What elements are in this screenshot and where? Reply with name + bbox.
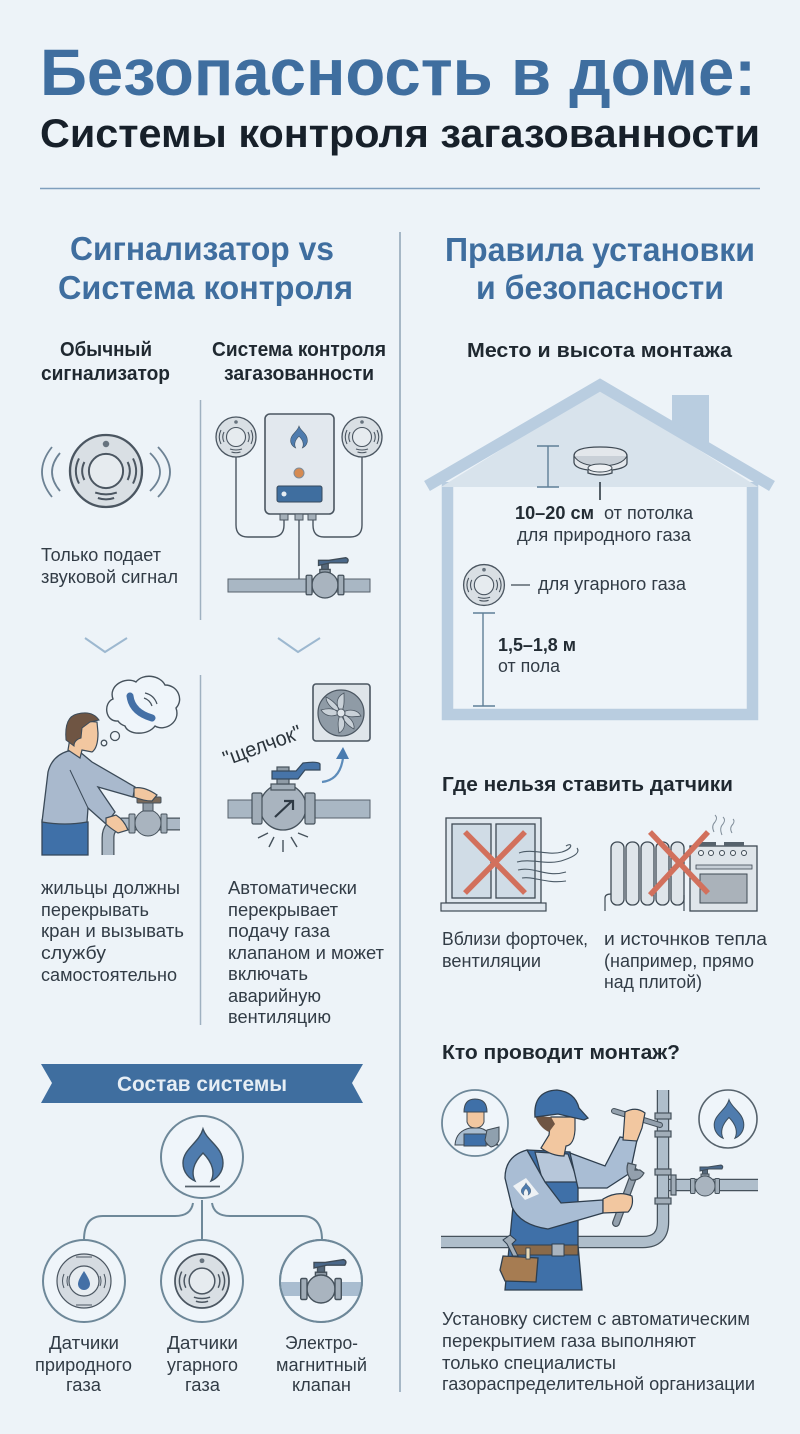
raised tool <box>614 1111 660 1125</box>
subheading: ordinary alarm: сигнализатор <box>41 363 170 385</box>
icon: central gas flame <box>161 1116 243 1198</box>
title <box>40 35 760 156</box>
icon: right detector <box>342 417 382 457</box>
illustration: installer at work <box>441 1090 758 1290</box>
heading: right column: и безопасности <box>476 269 724 306</box>
icon: CO sensor <box>161 1240 243 1322</box>
subheading: ordinary alarm <box>41 339 170 385</box>
subheading: control system: Система контроля <box>212 339 386 361</box>
icon: sounding detector <box>42 435 170 507</box>
text: automatic shutoff: клапаном и может <box>228 943 384 963</box>
pipe <box>108 824 180 855</box>
stove <box>690 815 757 911</box>
text: ceiling distance: для природного газа <box>517 525 692 545</box>
small valve <box>690 1165 723 1196</box>
text: near heat sources <box>604 929 768 992</box>
text: residents must act: службу <box>41 943 106 963</box>
text: automatic shutoff: Автоматически <box>228 878 357 898</box>
icon: pipe with valve <box>228 558 370 598</box>
belt <box>512 1245 578 1255</box>
labels <box>35 1333 367 1395</box>
text: only sound: Только подает <box>41 545 161 565</box>
icon: left detector <box>216 417 256 457</box>
roof <box>427 385 772 486</box>
icon: wall detector <box>464 565 504 605</box>
banner: system composition <box>41 1064 363 1103</box>
icon: ceiling detector <box>574 447 627 475</box>
ceiling bracket <box>537 446 559 487</box>
hands <box>106 788 157 833</box>
icon: solenoid valve <box>280 1240 362 1322</box>
panel: control system <box>212 339 386 598</box>
head <box>68 720 98 758</box>
labels: магнитный <box>276 1355 367 1375</box>
text: near vents: вентиляции <box>442 951 541 971</box>
trousers and bib <box>505 1150 582 1290</box>
tool pouch <box>500 1235 538 1282</box>
text: floor distance: от пола <box>498 656 561 676</box>
labels: Электро- <box>285 1333 358 1353</box>
wires <box>236 457 362 580</box>
text: near vents: Вблизи форточек, <box>442 929 588 949</box>
text: who installs: газораспределительной организации <box>442 1374 755 1394</box>
pipe <box>228 800 370 818</box>
icon: phone <box>130 696 152 718</box>
arrow: to fan <box>322 747 349 782</box>
title: Безопасность в доме: <box>40 35 756 109</box>
diagram: house <box>427 385 772 714</box>
text: near heat sources: (например, прямо <box>604 951 754 971</box>
hair <box>66 713 99 746</box>
text: only sound: звуковой сигнал <box>41 567 178 587</box>
subheading: location and height: Место и высота монтажа <box>467 340 733 362</box>
labels: Датчики <box>167 1333 238 1353</box>
text: automatic shutoff: вентиляцию <box>228 1007 331 1027</box>
chimney <box>672 395 709 450</box>
valve <box>252 762 320 830</box>
wrench <box>616 1172 635 1223</box>
thought bubble <box>107 676 180 733</box>
icon: radiator and stove with cross <box>605 815 757 911</box>
labels: Датчики <box>49 1333 119 1353</box>
text: near heat sources: и источнков тепла <box>604 929 768 949</box>
labels: газа <box>66 1375 102 1395</box>
hand with wrench <box>603 1194 632 1213</box>
heading: left column: Система контроля <box>58 269 353 306</box>
radiator <box>611 842 684 905</box>
icon: fan <box>313 684 370 741</box>
text: automatic shutoff: подачу газа <box>228 921 331 941</box>
connectors <box>84 1200 322 1240</box>
diagram: system composition <box>35 1116 367 1395</box>
heading: left column <box>58 230 353 306</box>
text: automatic shutoff: перекрывает <box>228 900 338 920</box>
title: Системы контроля загазованности <box>40 112 760 156</box>
text: residents must act: самостоятельно <box>41 965 177 985</box>
torso and arms <box>42 751 135 824</box>
hair <box>535 1116 555 1132</box>
text: who installs: Установку систем с автоматическим <box>442 1309 750 1329</box>
text: residents must act: перекрывать <box>41 900 149 920</box>
labels: природного <box>35 1355 132 1375</box>
text: residents must act: жильцы должны <box>41 878 180 898</box>
icon: natural gas sensor <box>43 1240 125 1322</box>
click label: "щелчок" <box>220 721 305 771</box>
text: ceiling distance: от потолка <box>604 503 694 523</box>
pipes <box>441 1090 758 1242</box>
heading: right column <box>445 231 755 306</box>
cap <box>535 1090 588 1120</box>
subheading: ordinary alarm: Обычный <box>60 339 152 361</box>
floor bracket <box>473 613 495 706</box>
neck and face <box>541 1117 575 1156</box>
valve <box>129 797 167 836</box>
subheading: where not to place: Где нельзя ставить датчики <box>442 774 733 796</box>
illustration: resident closing valve <box>42 676 180 855</box>
heading: right column: Правила установки <box>445 231 755 268</box>
icon: control unit <box>265 414 334 520</box>
pipe collars <box>655 1113 676 1204</box>
subheading: control system: загазованности <box>224 363 374 385</box>
icon: window with cross <box>441 818 578 911</box>
icon: certified specialist <box>442 1090 508 1156</box>
arrow: chevron left <box>85 638 127 652</box>
legs <box>42 820 88 855</box>
raised arm <box>570 1137 637 1188</box>
text: near heat sources: над плитой) <box>604 972 702 992</box>
banner: system composition: Состав системы <box>117 1073 287 1096</box>
text: who installs <box>442 1309 755 1394</box>
text: ceiling distance <box>515 503 694 545</box>
text: automatic shutoff: включать <box>228 964 308 984</box>
text: only sound <box>41 545 178 587</box>
text: residents must act <box>41 878 184 985</box>
panel: ordinary alarm <box>41 339 178 587</box>
text: floor distance: 1,5–1,8 м <box>498 635 576 655</box>
subheading: who installs: Кто проводит монтаж? <box>442 1042 680 1064</box>
text: for CO: для угарного газа <box>538 574 687 594</box>
labels: газа <box>185 1375 221 1395</box>
text: ceiling distance: 10–20 см <box>515 503 594 523</box>
text: automatic shutoff: аварийную <box>228 986 321 1006</box>
arrow: chevron right <box>278 638 320 652</box>
text: residents must act: кран и вызывать <box>41 921 184 941</box>
sleeve patch <box>513 1178 539 1200</box>
undershirt <box>535 1152 578 1182</box>
labels: клапан <box>292 1375 351 1395</box>
icon: gas flame <box>699 1090 757 1148</box>
raised hand <box>623 1109 645 1141</box>
text: near vents <box>442 929 588 971</box>
text: who installs: перекрытием газа выполняют <box>442 1331 696 1351</box>
illustration: automatic valve with fan <box>220 684 370 852</box>
text: automatic shutoff <box>228 878 384 1027</box>
walls <box>448 482 752 714</box>
text: who installs: только специалисты <box>442 1353 616 1373</box>
sparks <box>258 833 308 852</box>
text: floor distance <box>498 635 576 676</box>
subheading: control system <box>212 339 386 385</box>
labels: угарного <box>167 1355 238 1375</box>
heading: left column: Сигнализатор vs <box>70 230 334 267</box>
attic <box>441 388 758 487</box>
front arm <box>505 1150 603 1229</box>
